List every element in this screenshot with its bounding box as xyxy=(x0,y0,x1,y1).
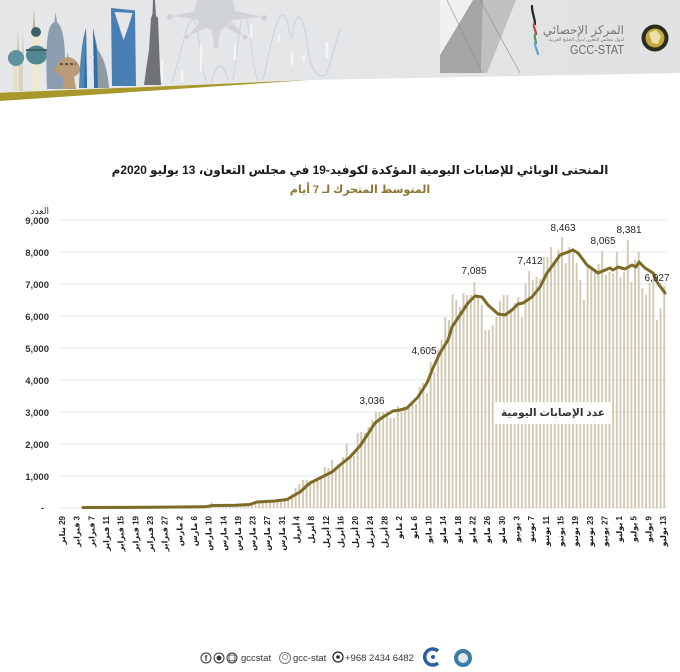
x axis date labels: 3 فبراير xyxy=(73,515,82,548)
y axis labels: 6,000 xyxy=(25,312,49,323)
icon: snapchat xyxy=(280,652,290,664)
Kingdom Tower xyxy=(111,8,136,86)
x axis date labels: 10 مايو xyxy=(424,515,434,544)
data labels: 4,605 xyxy=(411,346,437,357)
x axis date labels: 19 فبراير xyxy=(131,515,140,552)
x axis date labels: 7 فبراير xyxy=(87,515,96,548)
x axis date labels: 13 يوليو xyxy=(659,515,668,547)
y axis labels: 3,000 xyxy=(25,408,49,419)
x axis date labels: 28 أبريل xyxy=(380,515,390,548)
x axis date labels: 18 مايو xyxy=(454,515,463,544)
x axis date labels: 12 أبريل xyxy=(321,515,331,548)
x axis date labels: 4 أبريل xyxy=(292,515,302,544)
callout: daily cases xyxy=(494,402,611,424)
colour streaks xyxy=(532,6,538,54)
background curves xyxy=(172,15,340,82)
x axis date labels: 2 مايو xyxy=(395,515,404,540)
x axis date labels: 27 يونيو xyxy=(600,515,609,547)
logo name latin: GCC-STAT xyxy=(570,43,624,57)
icon: facebook xyxy=(201,653,211,663)
x axis date labels: 19 يونيو xyxy=(571,515,580,547)
x axis date labels: 2 مارس xyxy=(175,515,185,546)
x axis date labels: 31 مارس xyxy=(278,515,288,551)
header banner xyxy=(0,0,680,101)
icon: instagram xyxy=(227,653,237,663)
data labels: 7,085 xyxy=(461,266,487,277)
data labels xyxy=(359,223,670,407)
x axis date labels: 27 مارس xyxy=(263,515,273,551)
x axis date labels: 23 مارس xyxy=(249,515,259,551)
x axis date labels: 3 يونيو xyxy=(512,515,522,543)
pale light streaks xyxy=(162,25,327,82)
y axis labels: 4,000 xyxy=(25,376,49,387)
y axis labels: 5,000 xyxy=(25,344,49,355)
data labels: 8,381 xyxy=(616,225,642,236)
moving average line xyxy=(83,250,665,508)
y axis title: العدد xyxy=(31,206,49,216)
x axis date labels: 6 مايو xyxy=(410,515,419,540)
x axis date labels: 15 يونيو xyxy=(556,515,565,547)
y axis labels: - xyxy=(41,503,44,514)
daily cases bars xyxy=(212,237,664,508)
callout: daily cases: عدد الإصابات اليومية xyxy=(501,407,605,419)
virus graphic xyxy=(167,0,267,48)
x axis date labels xyxy=(58,515,668,552)
data labels: 8,065 xyxy=(590,236,616,247)
x axis date labels: 7 يونيو xyxy=(527,515,536,543)
y axis labels: 1,000 xyxy=(25,472,49,483)
x axis date labels: 5 يوليو xyxy=(630,515,639,543)
y axis labels xyxy=(25,216,49,514)
x axis date labels: 11 فبراير xyxy=(102,515,111,552)
x axis date labels: 6 مارس xyxy=(190,515,200,546)
x axis date labels: 8 أبريل xyxy=(306,515,316,544)
icon: certification mark xyxy=(425,649,438,665)
x axis date labels: 9 يوليو xyxy=(644,515,653,543)
chart xyxy=(25,206,670,552)
data labels: 8,463 xyxy=(550,223,576,234)
gold stripe xyxy=(0,80,310,101)
x axis date labels: 22 مايو xyxy=(468,515,478,544)
x axis date labels: 23 يونيو xyxy=(586,515,595,547)
y axis labels: 2,000 xyxy=(25,440,49,451)
subtitle: المتوسط المتحرك لـ 7 أيام xyxy=(290,182,430,196)
x axis date labels: 1 يوليو xyxy=(615,515,624,543)
skyline illustration xyxy=(8,0,161,91)
twisted tower xyxy=(46,12,65,89)
x axis date labels: 30 مايو xyxy=(498,515,507,544)
x axis date labels: 10 مارس xyxy=(205,515,215,551)
x axis date labels: 26 مايو xyxy=(483,515,492,544)
Kuwait towers xyxy=(8,9,47,91)
logo subtitle arabic: لدول مجلس التعاون لدول الخليج العربية xyxy=(549,37,624,42)
footer contacts xyxy=(201,649,472,667)
x axis date labels: 27 فبراير xyxy=(161,515,170,552)
y axis labels: 9,000 xyxy=(25,216,49,227)
icon: whatsapp xyxy=(333,652,343,662)
x axis date labels: 23 فبراير xyxy=(146,515,155,552)
Bahrain towers xyxy=(79,28,109,88)
x axis date labels: 14 مايو xyxy=(439,515,448,544)
icon: TUV badge xyxy=(454,649,472,667)
Burj Khalifa xyxy=(144,0,161,85)
y axis labels: 7,000 xyxy=(25,280,49,291)
icon: twitter xyxy=(214,653,224,663)
x axis date labels: 24 أبريل xyxy=(365,515,375,548)
logo name arabic: المركز الإحصائي xyxy=(543,23,624,38)
text: gccstat: gccstat xyxy=(241,653,271,664)
x axis date labels: 15 فبراير xyxy=(117,515,126,552)
icon: facebook: f xyxy=(205,654,208,663)
logo: GCC-STAT xyxy=(532,6,624,57)
x axis date labels: 19 مارس xyxy=(234,515,244,551)
text: phone number: +968 2434 6482 xyxy=(345,653,414,664)
data labels: 7,412 xyxy=(517,256,543,267)
data labels: 3,036 xyxy=(359,396,385,407)
title: المنحنى الوبائي للإصابات اليومية المؤكدة لكوفيد-19 في مجلس التعاون، 13 يوليو 2020م xyxy=(112,163,608,178)
data labels: 6,927 xyxy=(644,273,670,284)
x axis date labels: 16 أبريل xyxy=(336,515,346,548)
x axis date labels: 20 أبريل xyxy=(350,515,360,548)
x axis date labels: 29 يناير xyxy=(58,515,67,545)
y axis labels: 8,000 xyxy=(25,248,49,259)
icon: GCC emblem xyxy=(642,24,668,52)
x axis date labels: 14 مارس xyxy=(219,515,229,551)
x axis date labels: 11 يونيو xyxy=(542,515,551,547)
text: gcc-stat: gcc-stat xyxy=(293,653,327,664)
diagonal grey shapes xyxy=(440,0,483,73)
domed building xyxy=(54,52,82,89)
